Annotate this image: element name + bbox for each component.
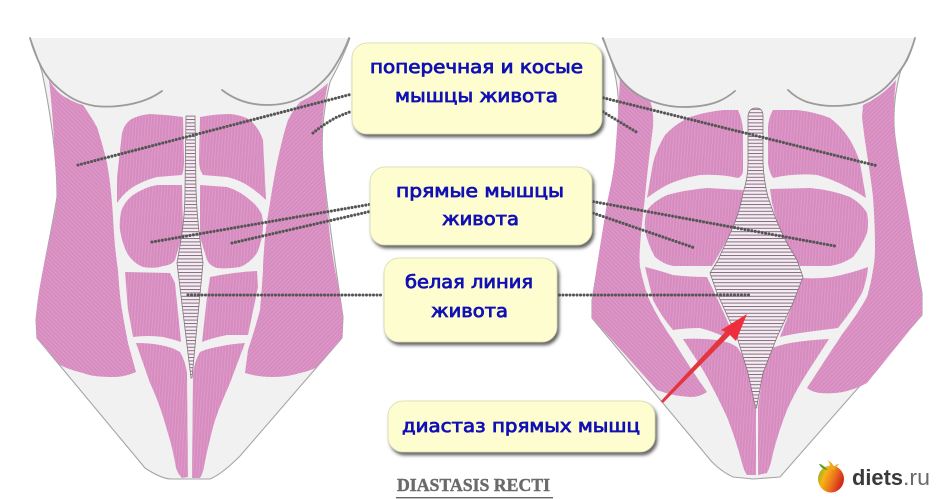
left torso body silhouette: [30, 38, 350, 479]
callout: transverse and oblique muscles: мышцы живота: [395, 86, 558, 107]
callout: linea alba: белая линия: [405, 272, 533, 293]
right torso: widened linea alba: [710, 108, 803, 408]
right torso: bottom left rectus: [683, 339, 756, 475]
right torso: middle left rectus: [645, 188, 743, 266]
callout: linea alba: [384, 258, 557, 342]
arrow: points to the widened linea alba: [661, 314, 747, 403]
leader line: linea alba, right torso: [556, 293, 750, 297]
left torso: upper right rectus: [199, 114, 266, 200]
right torso: lower left rectus: [645, 267, 730, 338]
left torso: left oblique muscle: [36, 80, 136, 377]
callout: diastasis: диастаз прямых мышц: [402, 416, 640, 437]
callout: transverse and oblique muscles: [352, 43, 602, 134]
callout: transverse and oblique muscles: поперечная и косые: [370, 57, 583, 78]
callout: rectus muscles: прямые мышцы: [396, 181, 564, 202]
logo: diets.ru: [818, 460, 930, 492]
right torso body silhouette: [592, 38, 922, 479]
callout: diastasis: [388, 401, 655, 452]
left torso: right breast outline: [222, 38, 349, 105]
callout: linea alba: живота: [431, 301, 508, 322]
left torso: lower left rectus: [125, 272, 181, 342]
left torso: middle right rectus: [200, 185, 263, 268]
left torso: right oblique muscle: [245, 83, 343, 377]
left torso: upper left rectus: [117, 114, 184, 203]
callout: rectus muscles: [370, 167, 592, 245]
left torso: linea alba: [177, 116, 203, 378]
logo: diets.ru: .ru: [903, 465, 930, 490]
left torso: middle left rectus: [120, 185, 183, 268]
left torso: normal abdomen: [30, 38, 350, 479]
leader lines: obliques, left torso: [78, 94, 352, 165]
right torso: upper left rectus: [647, 110, 743, 198]
leader lines: rectus, left torso: [152, 204, 372, 243]
right torso: upper right rectus: [768, 110, 866, 198]
right torso: diastasis abdomen: [592, 38, 922, 479]
right torso: bottom right rectus: [758, 339, 829, 475]
leader line: linea alba, left torso: [188, 293, 384, 297]
left torso: bottom right rectus: [192, 343, 245, 478]
leader lines: rectus, right torso: [590, 201, 835, 248]
right torso: middle right rectus: [770, 188, 868, 266]
left torso: left breast outline: [30, 38, 162, 107]
right torso: left oblique muscle: [592, 77, 707, 397]
right torso: right breast outline: [788, 38, 915, 106]
left torso: lower right rectus: [202, 271, 258, 342]
right torso: lower right rectus: [780, 267, 868, 337]
right torso: right oblique muscle: [807, 80, 922, 393]
leader lines: obliques, right torso: [600, 97, 878, 166]
logo text: diets: [852, 465, 903, 490]
caption: DIASTASIS RECTI: DIASTASIS RECTI: [397, 475, 550, 495]
left torso: bottom left rectus: [136, 343, 188, 478]
callout: rectus muscles: живота: [442, 209, 519, 230]
icon: apple: [818, 460, 844, 492]
right torso: left breast outline: [603, 38, 735, 107]
